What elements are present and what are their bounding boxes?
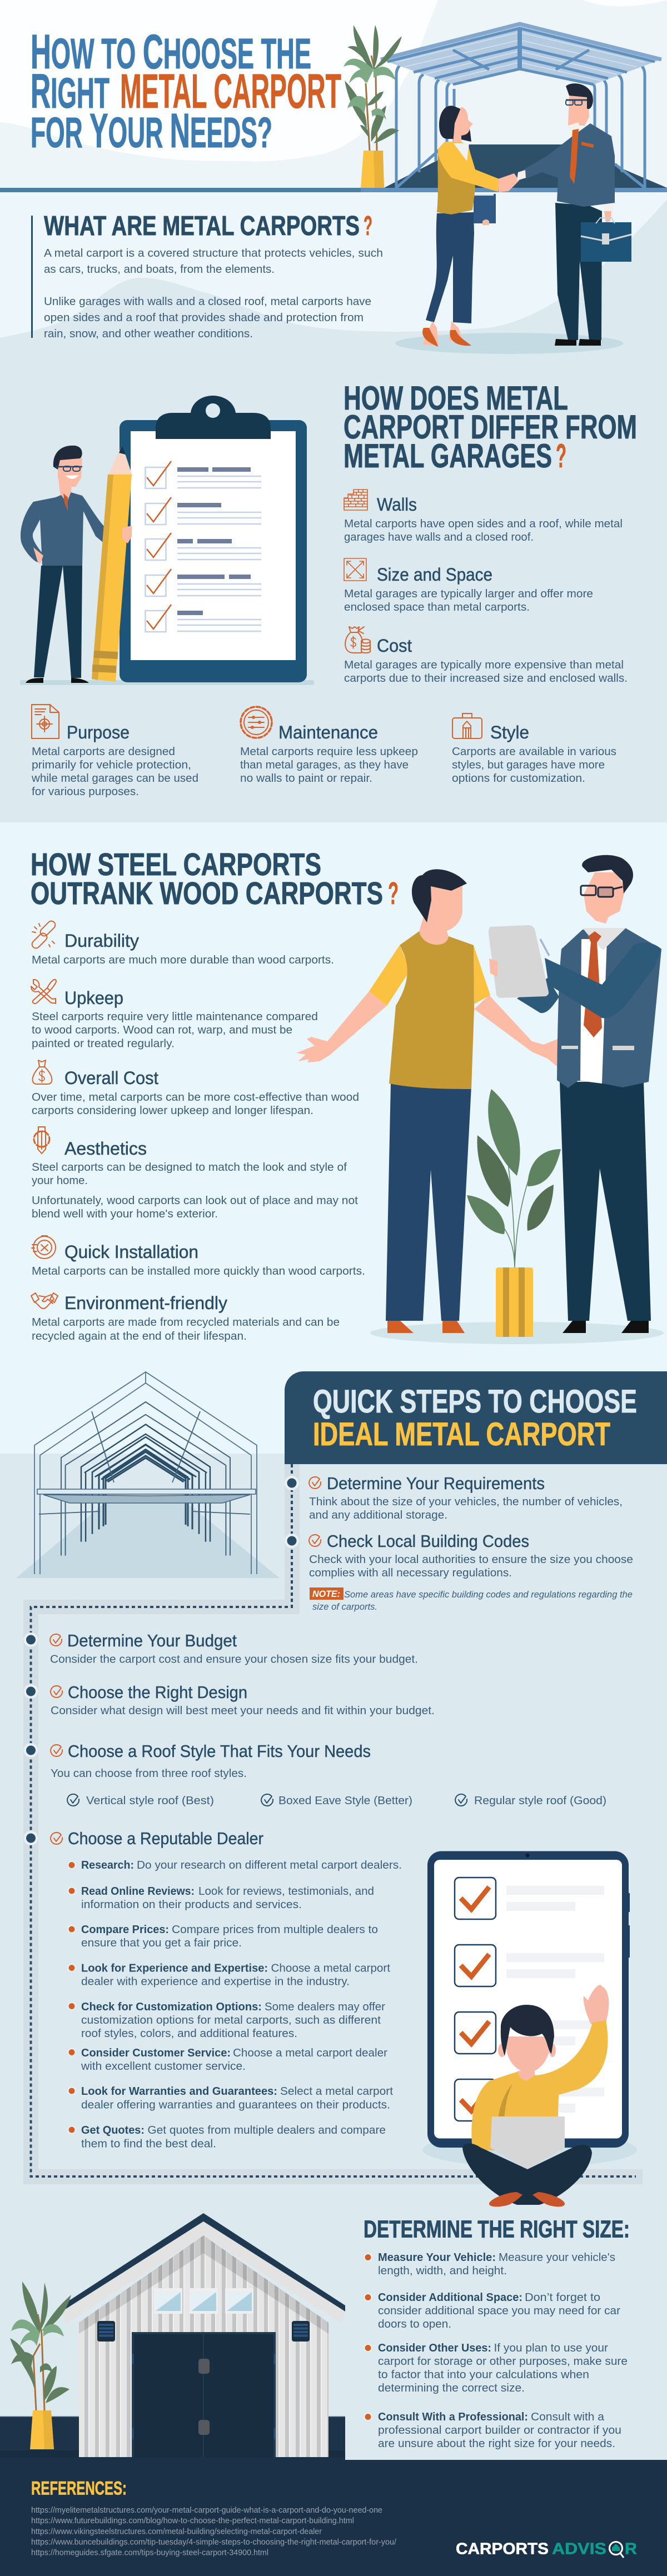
- text block: metal carport definition: as cars, trucks, and boats, from the elements.: [44, 263, 275, 276]
- item: walls: Walls: [377, 495, 417, 515]
- item: size and space: [344, 558, 593, 613]
- size tips list: Measure your vehicle's: [499, 2251, 615, 2264]
- icon: gear with sliders: [241, 707, 272, 738]
- dealer tips list: Some dealers may offer: [265, 2000, 385, 2013]
- item: aesthetics: your home.: [32, 1174, 88, 1187]
- checklist row 2: [146, 497, 261, 525]
- windows: [154, 2288, 253, 2314]
- item: maintenance: Metal carports require less upkeep: [240, 745, 418, 758]
- item: durability: Metal carports are much more durable than wood carports.: [32, 953, 334, 966]
- illustration: phone checklist with person: [422, 1851, 637, 2206]
- checklist row 4: [146, 569, 261, 596]
- size tips list: Measure Your Vehicle:: [378, 2251, 496, 2264]
- dealer tips list: roof styles, colors, and additional features.: [81, 2027, 297, 2040]
- size tips list: If you plan to use your: [494, 2342, 608, 2354]
- plant: [467, 1089, 561, 1337]
- size tips list: Consult With a Professional:: [378, 2410, 528, 2423]
- roof style options: [67, 1794, 606, 1807]
- illustration: woman and man shaking hands: [395, 83, 631, 354]
- size tips list: are unsure about the right size for your needs.: [378, 2437, 615, 2450]
- item: quick installation: Metal carports can be installed more quickly than wood carports.: [32, 1265, 365, 1277]
- icon: chain link: [31, 920, 57, 950]
- item: purpose: while metal garages can be used: [31, 772, 198, 785]
- icon: case with pencil: [452, 713, 482, 738]
- item: style: Carports are available in various: [452, 745, 616, 758]
- dealer tips list: them to find the best deal.: [81, 2137, 216, 2150]
- door: [132, 2332, 276, 2457]
- roof style options: Vertical style roof (Best): [86, 1794, 214, 1807]
- icon: expand arrows: [344, 558, 366, 581]
- size tips list: Consider Additional Space:: [378, 2291, 522, 2304]
- illustration: man with pencil: [21, 445, 132, 683]
- item: upkeep: [31, 980, 318, 1050]
- item: walls: garages have walls and a closed roof.: [344, 531, 534, 543]
- step: building codes: Check with your local authorities to ensure the size you choose: [309, 1553, 633, 1566]
- item: maintenance: no walls to paint or repair.: [240, 772, 372, 785]
- item: aesthetics: [32, 1127, 358, 1220]
- icon: document target: [32, 705, 59, 738]
- phone checklist: [455, 1878, 604, 2121]
- size tips list: carport for storage or other purposes, make sure: [378, 2355, 628, 2368]
- item: cost: [344, 627, 628, 685]
- step: building codes: [285, 1531, 633, 1579]
- item: purpose: primarily for vehicle protection,: [32, 758, 191, 771]
- item: quick installation: [32, 1236, 365, 1277]
- illustration: clipboard checklist: [20, 396, 314, 685]
- step: budget: Consider the carport cost and ensure your chosen size fits your budget.: [50, 1653, 418, 1666]
- item: style: [452, 713, 616, 785]
- size tips list: length, width, and height.: [378, 2264, 507, 2277]
- dealer tips list: Get quotes from multiple dealers and compare: [148, 2124, 386, 2136]
- item: maintenance: [240, 707, 418, 785]
- step: determine requirements: Think about the size of your vehicles, the number of vehicles,: [309, 1495, 623, 1508]
- item: aesthetics: Steel carports can be designed to match the look and style of: [32, 1161, 347, 1174]
- item: overall cost: [32, 1060, 359, 1117]
- step: determine requirements: and any additional storage.: [309, 1509, 447, 1521]
- dealer tips list: Read Online Reviews:: [81, 1885, 195, 1898]
- woman: [422, 106, 519, 347]
- illustration: garage building: [62, 2213, 345, 2457]
- item: durability: [31, 920, 334, 966]
- item: purpose: [31, 705, 198, 798]
- item: purpose: Metal carports are designed: [32, 745, 175, 758]
- item: upkeep: painted or treated regularly.: [32, 1037, 175, 1050]
- band under hero: [0, 188, 667, 192]
- heading: steel vs wood: HOW STEEL CARPORTS: [31, 847, 321, 882]
- item: quick installation: Quick Installation: [64, 1242, 198, 1262]
- checklist row 5: [146, 605, 261, 632]
- step: design: [23, 1683, 435, 1717]
- step: reputable dealer: Choose a Reputable Dealer: [68, 1829, 263, 1848]
- heading: steel vs wood: OUTRANK WOOD CARPORTS: [31, 876, 383, 911]
- title: [31, 25, 341, 158]
- references: [31, 2478, 397, 2558]
- dealer tips list: Look for Warranties and Guarantees:: [81, 2085, 277, 2098]
- dealer tips list: ensure that you get a fair price.: [81, 1936, 242, 1949]
- size tips list: to factor that into your calculations when: [378, 2368, 589, 2381]
- path band and dotted timeline: [23, 1464, 643, 2184]
- step: budget: [23, 1631, 418, 1666]
- dealer tips list: Choose a metal carport dealer: [233, 2046, 387, 2059]
- heading: what are metal carports: ?: [364, 211, 372, 241]
- background: hero: [0, 0, 667, 361]
- logo: carports advisor: ADVIS: [552, 2540, 606, 2558]
- dealer tips list: dealer with experience and expertise in the industry.: [81, 1975, 350, 1988]
- dealer tips list: Consider Customer Service:: [81, 2046, 231, 2059]
- logo: carports advisor: CARPORTS: [456, 2540, 549, 2558]
- item: walls: [344, 490, 623, 543]
- heading: carport vs garage: HOW DOES METAL: [344, 380, 568, 417]
- roof style options: Regular style roof (Good): [474, 1794, 606, 1807]
- illustration: plant with yellow pot: [344, 25, 402, 188]
- step: design: Consider what design will best meet your needs and fit within your budget.: [51, 1704, 435, 1717]
- vents: [97, 2321, 310, 2342]
- item: cost: carports due to their increased size and enclosed walls.: [344, 672, 628, 685]
- icon: brick wall: [344, 490, 367, 510]
- step: roof style: [23, 1741, 606, 1807]
- title: FOR YOUR NEEDS?: [31, 104, 272, 158]
- logo: carports advisor: [456, 2540, 637, 2558]
- heading: carport vs garage: ?: [556, 437, 566, 475]
- note callout: NOTE:: [312, 1589, 340, 1599]
- item: environment friendly: Environment-friendly: [64, 1293, 227, 1313]
- man: [517, 83, 631, 346]
- dealer tips list: information on their products and services.: [81, 1898, 302, 1911]
- dealer tips list: [68, 1859, 402, 2150]
- title: METAL CARPORT: [120, 64, 341, 118]
- dealer tips list: Look for Experience and Expertise:: [81, 1961, 268, 1975]
- size tips list: professional carport builder or contractor if you: [378, 2424, 621, 2437]
- heading: carport vs garage: [344, 380, 637, 475]
- dealer tips list: Look for reviews, testimonials, and: [198, 1885, 374, 1898]
- text block: metal carport definition: rain, snow, and other weather conditions.: [44, 327, 253, 340]
- item: size and space: Metal garages are typically larger and offer more: [344, 587, 593, 600]
- references: https://www.buncebuildings.com/tip-tuesday/4-simple-steps-to-choosing-the-right-metal-carport-for-you/: [31, 2538, 397, 2547]
- item: environment friendly: [31, 1293, 340, 1342]
- icon: stopwatch: [32, 1236, 56, 1259]
- heading: what are metal carports: [31, 211, 372, 338]
- dealer tips list: Research:: [81, 1859, 134, 1871]
- item: cost: Metal garages are typically more expensive than metal: [344, 658, 624, 671]
- icon: gear and pencil: [34, 1127, 49, 1154]
- title: RIGHT: [31, 64, 109, 118]
- item: aesthetics: Unfortunately, wood carports can look out of place and may not: [32, 1194, 358, 1207]
- step: determine requirements: [285, 1474, 623, 1521]
- icon: money bag and coins: [345, 627, 370, 653]
- references: https://myelitemetalstructures.com/your-metal-carport-guide-what-is-a-carport-and-do-you-need-one: [31, 2506, 382, 2515]
- item: size and space: Size and Space: [377, 565, 492, 585]
- heading: what are metal carports: WHAT ARE METAL CARPORTS: [44, 211, 360, 241]
- references: https://homeguides.sfgate.com/tips-buying-steel-carport-34900.html: [31, 2549, 268, 2558]
- size tips list: doors to open.: [378, 2318, 451, 2330]
- dealer tips list: Compare Prices:: [81, 1923, 169, 1936]
- size tips list: Consult with a: [531, 2410, 605, 2423]
- item: style: Style: [490, 722, 529, 742]
- size tips list: Don’t forget to: [525, 2291, 600, 2304]
- step: building codes: complies with all necessary regulations.: [309, 1566, 512, 1579]
- dealer tips list: customization options for metal carports, such as different: [81, 2014, 381, 2026]
- item: upkeep: Upkeep: [64, 988, 123, 1008]
- person with laptop: [462, 1985, 609, 2206]
- references: https://www.futurebuildings.com/blog/how-to-choose-the-perfect-metal-carport-building.html: [31, 2517, 354, 2525]
- dealer tips list: Get Quotes:: [81, 2124, 145, 2136]
- size tips list: determining the correct size.: [378, 2382, 525, 2394]
- item: style: options for customization.: [452, 772, 585, 785]
- footer background: [0, 2416, 667, 2576]
- size tips list: [364, 2251, 628, 2450]
- item: environment friendly: Metal carports are made from recycled materials and can be: [32, 1316, 340, 1329]
- heading: steel vs wood: [31, 847, 399, 911]
- item: maintenance: Maintenance: [278, 722, 378, 742]
- references: REFERENCES:: [31, 2478, 127, 2499]
- heading banner: quick steps: [285, 1371, 667, 1464]
- item: aesthetics: blend well with your home's exterior.: [32, 1207, 218, 1220]
- note callout: [310, 1587, 633, 1612]
- text block: metal carport definition: [44, 247, 383, 340]
- item: environment friendly: recycled again at the end of their lifespan.: [32, 1330, 247, 1342]
- logo: carports advisor: R: [625, 2540, 637, 2558]
- references: https://www.vikingsteelstructures.com/metal-building/selecting-metal-carport-dealer: [31, 2527, 322, 2536]
- size tips list: consider additional space you may need for car: [378, 2304, 620, 2317]
- roof style options: Boxed Eave Style (Better): [278, 1794, 412, 1807]
- icon: handshake: [31, 1293, 58, 1309]
- item: aesthetics: Aesthetics: [64, 1139, 147, 1159]
- item: upkeep: Steel carports require very little maintenance compared: [32, 1010, 318, 1023]
- item: purpose: for various purposes.: [32, 785, 139, 798]
- item: walls: Metal carports have open sides and a roof, while metal: [344, 517, 623, 530]
- text block: metal carport definition: Unlike garages with walls and a closed roof, metal carports have: [44, 295, 371, 308]
- item: cost: Cost: [377, 636, 412, 656]
- item: overall cost: carports considering lower upkeep and longer lifespan.: [32, 1104, 313, 1117]
- note callout: size of carports.: [312, 1601, 377, 1612]
- illustration: two men with plant: [296, 855, 664, 1344]
- item: size and space: enclosed space than metal carports.: [344, 601, 530, 613]
- checklist row 1: [146, 461, 261, 488]
- dealer tips list: dealer offering warranties and guarantees on their products.: [81, 2098, 390, 2111]
- dealer tips list: with excellent customer service.: [81, 2060, 246, 2073]
- icon: money bag: [33, 1060, 52, 1084]
- step: roof style: You can choose from three roof styles.: [51, 1767, 247, 1780]
- man with tablet: [489, 855, 661, 1333]
- man in yellow vest: [296, 869, 558, 1333]
- step: design: Choose the Right Design: [68, 1683, 247, 1702]
- size tips list: Consider Other Uses:: [378, 2342, 491, 2354]
- item: style: styles, but garages have more: [452, 758, 605, 771]
- illustration: steel carport frame: [16, 1372, 280, 1578]
- dealer tips list: Compare prices from multiple dealers to: [172, 1923, 378, 1936]
- dealer tips list: Choose a metal carport: [271, 1961, 390, 1975]
- item: purpose: Purpose: [67, 722, 130, 742]
- item: upkeep: to wood carports. Wood can rot, warp, and must be: [32, 1024, 292, 1036]
- title: HOW TO CHOOSE THE: [31, 25, 311, 79]
- dealer tips list: Do your research on different metal carport dealers.: [137, 1859, 402, 1871]
- item: overall cost: Over time, metal carports can be more cost-effective than wood: [32, 1091, 359, 1104]
- illustration: carport: [381, 24, 667, 188]
- heading: steel vs wood: ?: [388, 876, 399, 911]
- text block: metal carport definition: open sides and a roof that provides shade and protection from: [44, 311, 364, 324]
- item: maintenance: than metal garages, as they have: [240, 758, 409, 771]
- step: budget: Determine Your Budget: [67, 1631, 237, 1650]
- icon: wrench and screwdriver: [31, 980, 56, 1004]
- step: roof style: Choose a Roof Style That Fits Your Needs: [68, 1741, 371, 1761]
- checklist row 3: [146, 533, 261, 560]
- dealer tips list: Check for Customization Options:: [81, 2000, 262, 2013]
- step: determine requirements: Determine Your Requirements: [327, 1474, 545, 1493]
- step: building codes: Check Local Building Codes: [327, 1531, 529, 1551]
- illustration: plant on left of garage: [10, 2282, 71, 2449]
- note callout: Some areas have specific building codes and regulations regarding the: [344, 1589, 633, 1600]
- item: durability: Durability: [64, 931, 139, 951]
- item: overall cost: Overall Cost: [64, 1068, 158, 1088]
- dealer tips list: Select a metal carport: [280, 2085, 393, 2098]
- heading: carport vs garage: METAL GARAGES: [344, 437, 552, 475]
- text block: metal carport definition: A metal carport is a covered structure that protects vehicles, such: [44, 247, 383, 259]
